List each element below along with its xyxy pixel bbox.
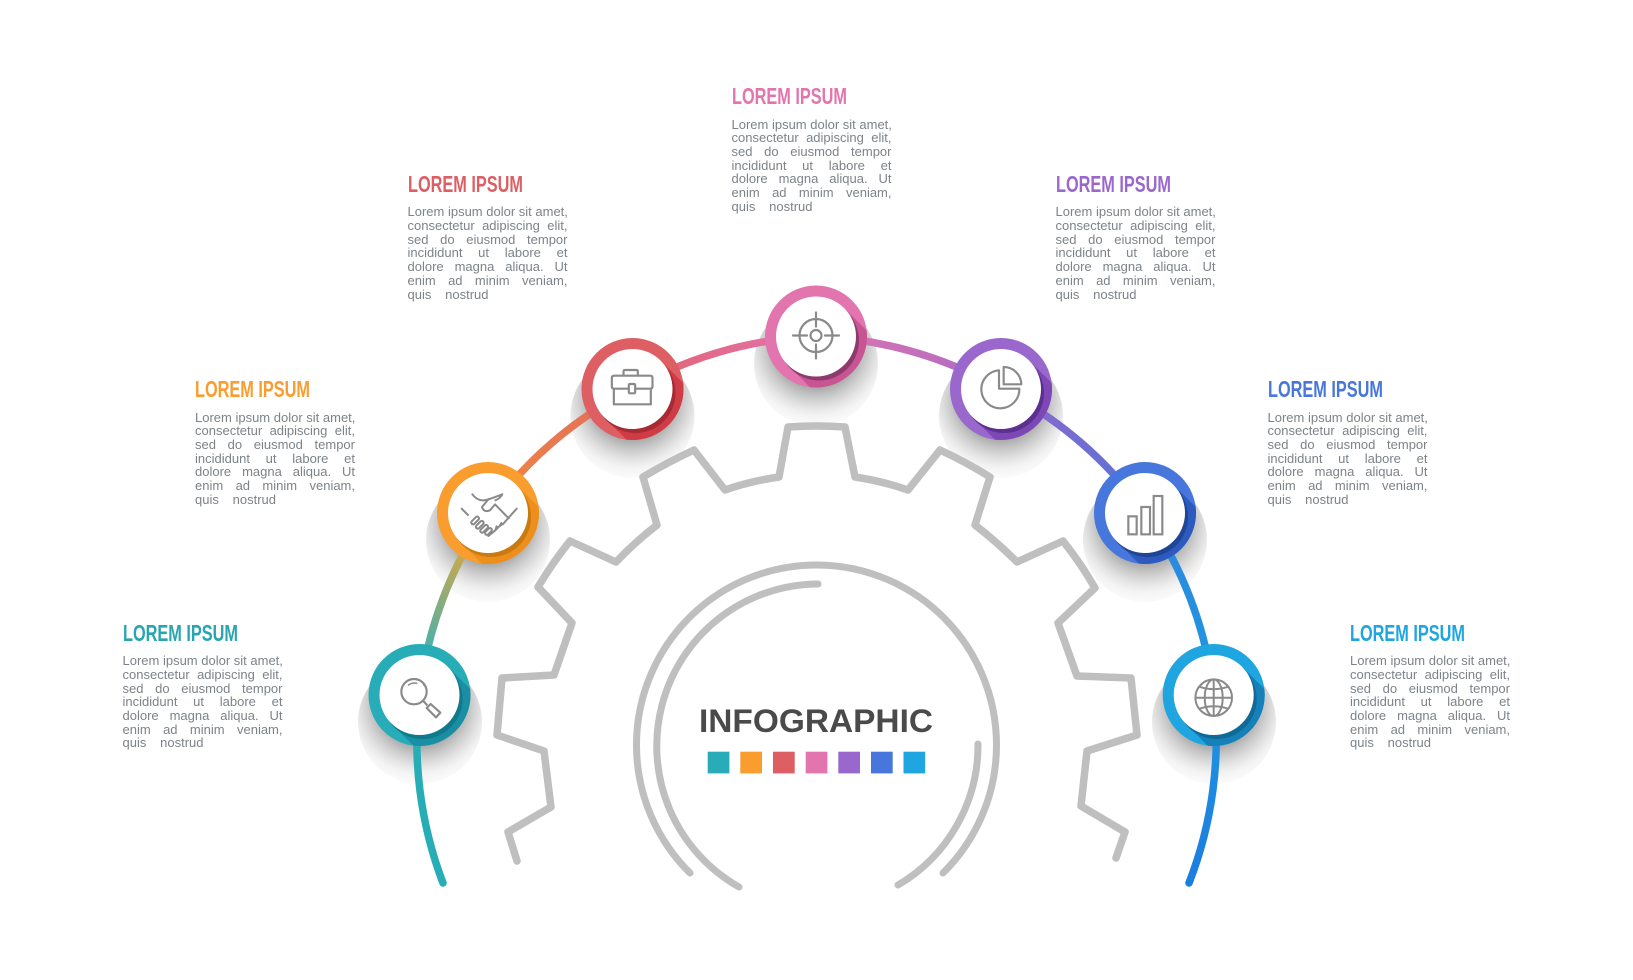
text block: step 7: sed do eiusmod tempor [1350, 681, 1510, 696]
text block: step 4: dolore magna aliqua. Ut [732, 171, 892, 186]
text block: step 3: Lorem ipsum dolor sit amet, [408, 204, 568, 219]
text block: step 5: consectetur adipiscing elit, [1056, 218, 1216, 233]
step 6 circle: blue [1094, 462, 1196, 564]
heading: step 2: LOREM IPSUM [195, 376, 310, 402]
text block: step 5 [1056, 204, 1216, 302]
main diagram [358, 286, 1276, 890]
text block: step 3: enim ad minim veniam, [408, 273, 568, 288]
text block: step 1: incididunt ut labore et [122, 694, 282, 709]
central double ring [636, 565, 996, 887]
text block: step 4: enim ad minim veniam, [732, 185, 892, 200]
text block: step 2: enim ad minim veniam, [195, 478, 355, 493]
text block: step 3 [408, 204, 568, 302]
text block: step 6 [1268, 410, 1428, 507]
text block: step 5: enim ad minim veniam, [1056, 273, 1216, 288]
text block: step 2: dolore magna aliqua. Ut [195, 464, 355, 479]
text block: step 6: Lorem ipsum dolor sit amet, [1268, 410, 1428, 425]
text block: step 7: Lorem ipsum dolor sit amet, [1350, 653, 1510, 668]
panel: step 2 text [195, 376, 355, 507]
text block: step 1: sed do eiusmod tempor [122, 681, 282, 696]
text block: step 6: sed do eiusmod tempor [1268, 437, 1428, 452]
text block: step 1: quis nostrud [122, 735, 204, 750]
drop shadows under step circles [358, 302, 1276, 784]
text block: step 4: incididunt ut labore et [732, 158, 892, 173]
step 7 circle: cyan [1162, 644, 1265, 746]
text block: step 4: Lorem ipsum dolor sit amet, [732, 117, 892, 132]
icon: globe [1195, 679, 1232, 716]
text block: step 2: Lorem ipsum dolor sit amet, [195, 410, 355, 425]
text block: step 7: quis nostrud [1350, 735, 1431, 750]
text block: step 1: consectetur adipiscing elit, [122, 667, 282, 682]
step 1 circle: teal [368, 644, 470, 746]
text block: step 1: Lorem ipsum dolor sit amet, [122, 653, 283, 668]
text block: step 3: sed do eiusmod tempor [408, 232, 568, 247]
step 2 circle: orange [437, 462, 539, 564]
panel: step 7 text [1350, 620, 1510, 750]
text block: step 3: consectetur adipiscing elit, [408, 218, 568, 233]
coloured arc connector [417, 336, 1216, 883]
text block: step 5: Lorem ipsum dolor sit amet, [1056, 204, 1216, 219]
icon: target [793, 312, 839, 358]
text block: step 2: consectetur adipiscing elit, [195, 423, 355, 438]
text block: step 2: quis nostrud [195, 492, 276, 507]
text block: step 6: incididunt ut labore et [1268, 451, 1428, 466]
text block: step 6: dolore magna aliqua. Ut [1268, 464, 1428, 479]
heading: step 6: LOREM IPSUM [1268, 376, 1382, 402]
text block: step 6: quis nostrud [1268, 492, 1348, 507]
text block: step 6: enim ad minim veniam, [1268, 478, 1428, 493]
panel: step 1 text [122, 620, 283, 750]
text block: step 6: consectetur adipiscing elit, [1268, 423, 1428, 438]
text block: step 5: quis nostrud [1056, 287, 1136, 302]
text block: step 2: incididunt ut labore et [195, 451, 355, 466]
text block: step 1: dolore magna aliqua. Ut [122, 708, 282, 723]
heading: step 5: LOREM IPSUM [1056, 171, 1170, 197]
step 5 circle: purple [950, 338, 1052, 440]
icon: briefcase [612, 370, 652, 404]
text block: step 2: sed do eiusmod tempor [195, 437, 355, 452]
colour legend squares [708, 752, 925, 773]
text block: step 5: sed do eiusmod tempor [1056, 232, 1216, 247]
text block: step 1 [122, 653, 283, 750]
icon: pie chart [981, 367, 1021, 408]
text block: step 5: incididunt ut labore et [1056, 245, 1216, 260]
text block: step 7: consectetur adipiscing elit, [1350, 667, 1510, 682]
text block: step 7: incididunt ut labore et [1350, 694, 1510, 709]
icon: handshake [462, 494, 517, 536]
text block: step 2 [195, 410, 355, 507]
icon: magnifier [401, 679, 440, 717]
text block: step 4: consectetur adipiscing elit, [732, 130, 892, 145]
gear outline [497, 426, 1137, 861]
heading: step 3: LOREM IPSUM [408, 171, 522, 197]
text block: step 7: enim ad minim veniam, [1350, 722, 1510, 737]
text block: step 7 [1350, 653, 1510, 750]
text block: step 3: dolore magna aliqua. Ut [408, 259, 568, 274]
panel: step 6 text [1268, 376, 1428, 507]
center title: INFOGRAPHIC [699, 703, 933, 739]
text block: step 5: dolore magna aliqua. Ut [1056, 259, 1216, 274]
icon: bar chart [1128, 496, 1162, 534]
text block: step 4: sed do eiusmod tempor [732, 144, 892, 159]
heading: step 4: LOREM IPSUM [732, 83, 846, 109]
step 3 circle: red [582, 338, 684, 440]
step 4 circle: pink [765, 286, 867, 388]
panel: step 5 text [1056, 171, 1216, 302]
panel: step 4 text [732, 83, 892, 214]
heading: step 7: LOREM IPSUM [1350, 620, 1465, 646]
text block: step 7: dolore magna aliqua. Ut [1350, 708, 1510, 723]
text block: step 3: incididunt ut labore et [408, 245, 568, 260]
panel: step 3 text [408, 171, 568, 302]
text block: step 3: quis nostrud [408, 287, 488, 302]
text block: step 1: enim ad minim veniam, [122, 722, 282, 737]
heading: step 1: LOREM IPSUM [122, 620, 238, 646]
text block: step 4: quis nostrud [732, 199, 812, 214]
text block: step 4 [732, 117, 892, 214]
